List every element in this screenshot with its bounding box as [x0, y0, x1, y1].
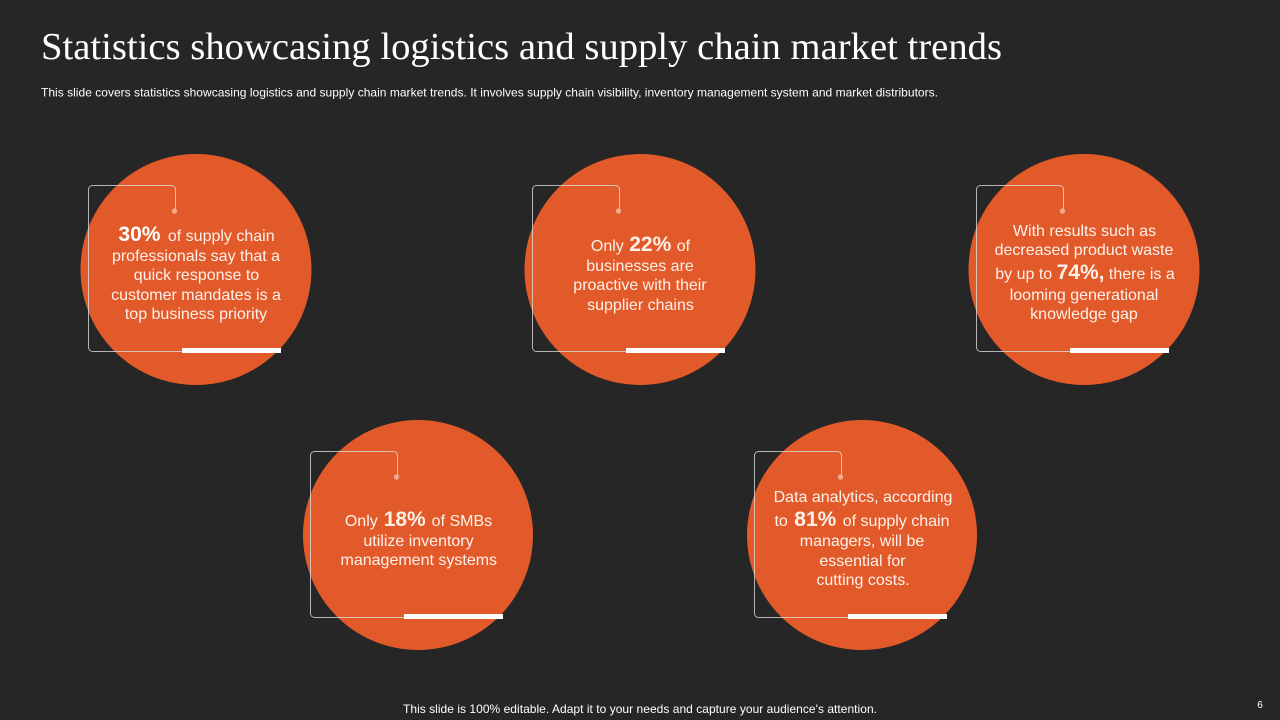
accent bar [848, 614, 947, 619]
stat text: management systems [341, 552, 497, 569]
stat text: proactive with their [573, 277, 707, 294]
accent bar [404, 614, 503, 619]
panel: stat 30% [80, 154, 312, 385]
accent bar [1070, 348, 1169, 353]
panel: stat 22% [524, 154, 756, 385]
footer note: This slide is 100% editable. Adapt it to your needs and capture your audience's attention. [403, 702, 877, 716]
stat text: top business priority [125, 306, 267, 323]
stat text: supplier chains [587, 297, 694, 314]
stat text: Only 22% of [591, 233, 691, 256]
stat text: decreased product waste [995, 242, 1173, 259]
frame: stat 18% [310, 452, 404, 618]
stat text: customer mandates is a [111, 287, 281, 304]
frame: stat 81% [754, 452, 848, 618]
connector dot [394, 474, 399, 480]
connector dot [172, 208, 177, 214]
stat text: by up to 74%, there is a [995, 261, 1175, 284]
accent bar [626, 348, 725, 353]
stat text: looming generational [1010, 287, 1158, 304]
connector dot [838, 474, 843, 480]
panel: stat 18% [303, 420, 533, 650]
circle: stat 74% [968, 154, 1200, 385]
stat text: 30% of supply chain [118, 223, 275, 246]
stat text: With results such as [1013, 223, 1156, 240]
stat text: Data analytics, according [774, 489, 952, 506]
stat text: professionals say that a [112, 248, 280, 265]
circle: stat 22% [524, 154, 756, 385]
stat text: to 81% of supply chain [774, 508, 950, 531]
subtitle: This slide covers statistics showcasing logistics and supply chain market trends. It involves supply chain visibility, inventory management system and market distributors. [41, 86, 938, 100]
stat text: cutting costs. [816, 572, 910, 589]
circle: stat 30% [80, 154, 312, 385]
frame: stat 22% [532, 186, 626, 352]
stat text: knowledge gap [1030, 306, 1138, 323]
frame: stat 74% [976, 186, 1070, 352]
circle: stat 81% [747, 420, 977, 650]
stat text: Only 18% of SMBs [345, 508, 492, 531]
stat text: quick response to [134, 267, 259, 284]
connector dot [1060, 208, 1065, 214]
stat text [995, 223, 1175, 323]
stat text [573, 233, 707, 314]
panel: stat 74% [968, 154, 1200, 385]
connector dot [616, 208, 621, 214]
stat text [341, 508, 497, 569]
stat text: businesses are [586, 258, 694, 275]
stat text: managers, will be [800, 533, 924, 550]
page number: 6 [1257, 700, 1263, 711]
panel: stat 81% [747, 420, 977, 650]
stat text: utilize inventory [363, 533, 474, 550]
circle: stat 18% [303, 420, 533, 650]
accent bar [182, 348, 281, 353]
stat text [111, 223, 281, 323]
title: Statistics showcasing logistics and supply chain market trends [41, 26, 1002, 68]
frame: stat 30% [88, 186, 182, 352]
stat text: essential for [819, 553, 906, 570]
stat text [774, 489, 952, 589]
